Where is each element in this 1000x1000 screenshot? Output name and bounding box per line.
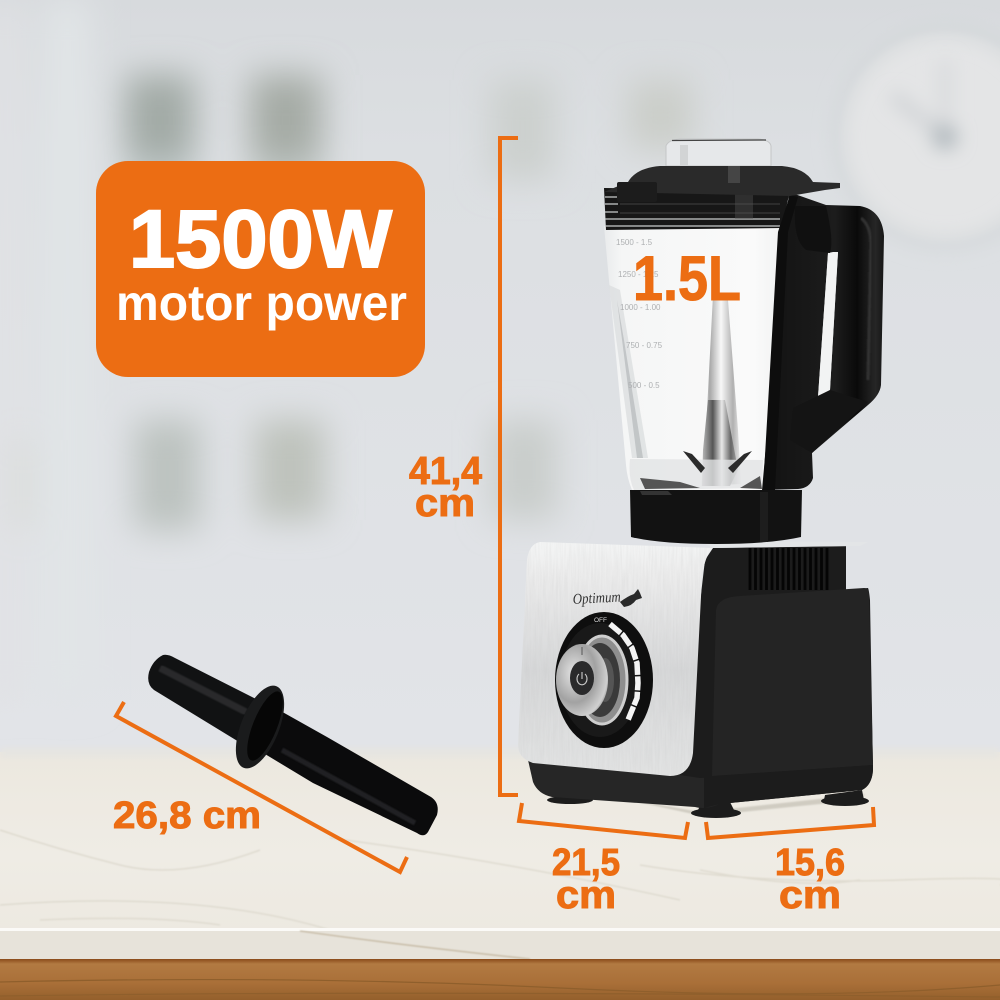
measurement marks: 1000 - 1.00 bbox=[620, 303, 661, 312]
label: height: cm bbox=[415, 482, 475, 525]
dimension bracket: height bbox=[500, 138, 518, 795]
label: depth bbox=[552, 842, 620, 917]
lid body bbox=[604, 166, 840, 196]
glass jar bbox=[604, 226, 780, 490]
marble countertop bbox=[0, 748, 1000, 960]
blade shaft bbox=[701, 295, 741, 486]
label: plunger length: 26,8 cm bbox=[113, 795, 261, 837]
wooden table edge bbox=[0, 959, 1000, 1000]
brand logo: Optimum bbox=[572, 589, 621, 608]
background: blurred wall clock bbox=[838, 30, 1000, 244]
vent grille bbox=[750, 548, 827, 590]
label: height bbox=[409, 450, 482, 525]
badge: motor power bbox=[96, 161, 425, 377]
measurement marks: 500 - 0.5 bbox=[628, 381, 660, 390]
power icon bbox=[577, 672, 587, 685]
jar top band bbox=[604, 188, 790, 230]
label: depth: 21,5 bbox=[552, 842, 620, 884]
control dial: OFF bbox=[594, 617, 607, 624]
jar reflection bbox=[609, 285, 648, 458]
measurement marks: 750 - 0.75 bbox=[626, 341, 663, 350]
badge value: 1500W bbox=[129, 194, 393, 285]
steel front panel bbox=[515, 540, 715, 780]
blender feet bbox=[547, 790, 869, 818]
jar base bbox=[630, 459, 763, 490]
blender base bbox=[515, 540, 873, 808]
dimension bracket: depth bbox=[519, 803, 688, 838]
speed scale bbox=[610, 624, 638, 720]
control dial bbox=[555, 612, 653, 748]
handle bbox=[762, 192, 884, 490]
lid bbox=[604, 139, 840, 202]
measurement marks: 1250 - 1.25 bbox=[618, 270, 659, 279]
background: blurred kitchen wall bbox=[0, 0, 1000, 760]
steel top plate bbox=[700, 541, 868, 548]
label: width: cm bbox=[779, 874, 841, 917]
label: width bbox=[775, 842, 845, 917]
badge caption: motor power bbox=[116, 275, 407, 331]
blender bbox=[515, 139, 884, 818]
plunger tool bbox=[148, 655, 438, 835]
measurement marks bbox=[616, 238, 663, 390]
label: height: 41,4 bbox=[409, 450, 482, 493]
blender collar bbox=[630, 490, 802, 544]
measurement marks: 1500 - 1.5 bbox=[616, 238, 653, 247]
label: width: 15,6 bbox=[775, 842, 845, 884]
dimension bracket: width bbox=[706, 807, 874, 838]
lid measuring cup bbox=[666, 139, 771, 166]
label: jar capacity: 1.5L bbox=[633, 244, 741, 314]
dimension bracket: plunger length bbox=[116, 702, 407, 872]
label: depth: cm bbox=[556, 874, 616, 917]
